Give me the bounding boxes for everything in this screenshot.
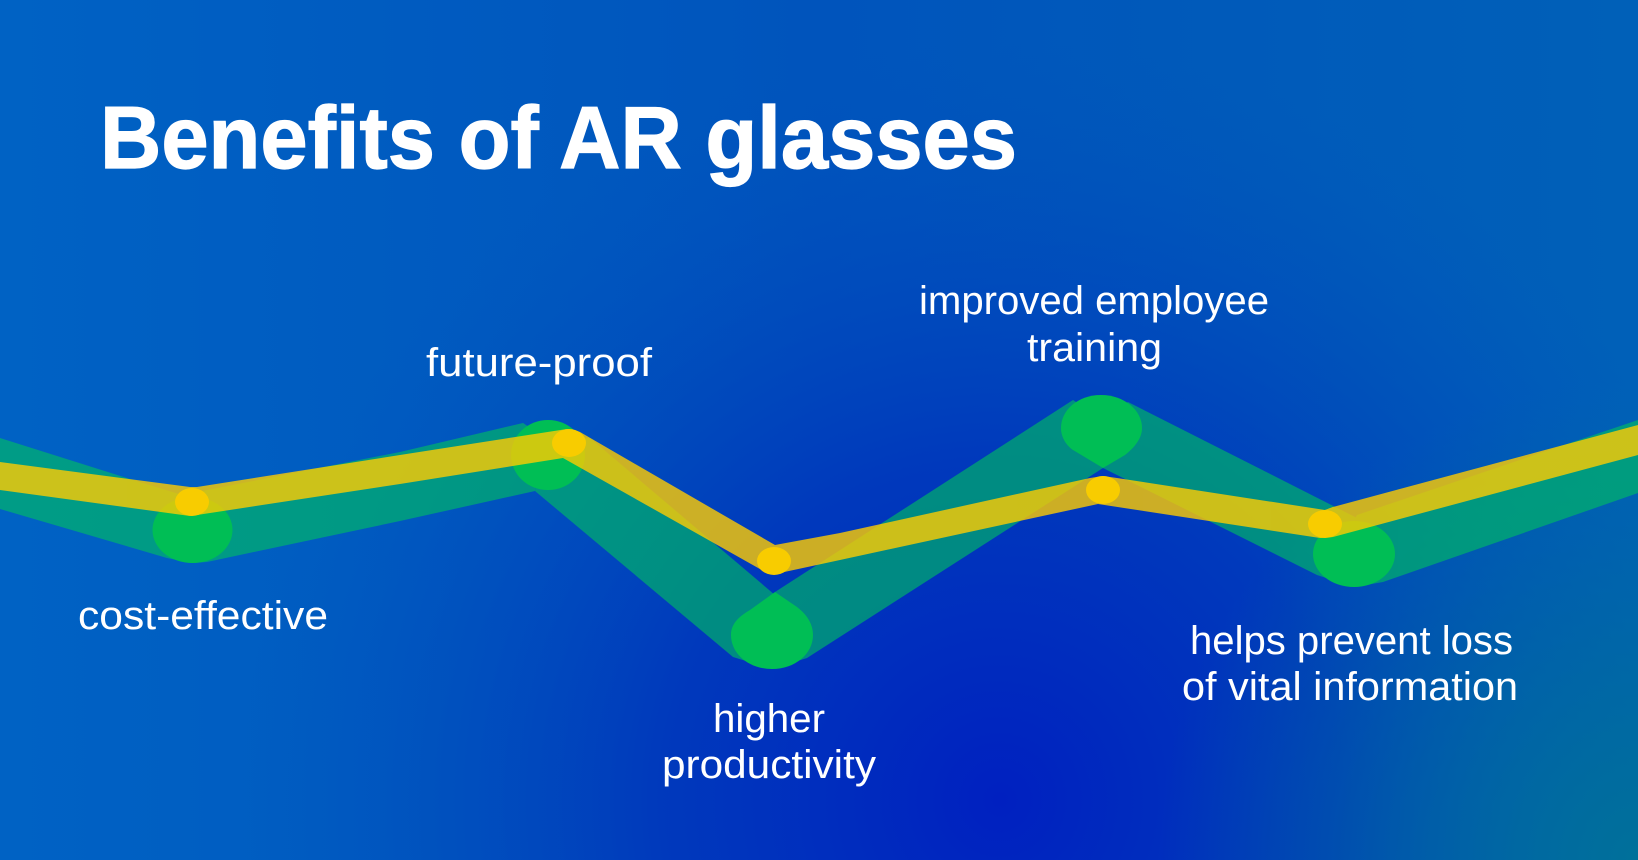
node: higher productivity xyxy=(731,592,813,669)
label: helps prevent loss of vital information: of vital information xyxy=(1182,665,1518,709)
label: helps prevent loss of vital information xyxy=(1182,619,1518,709)
label: higher productivity: higher xyxy=(713,697,825,741)
label: helps prevent loss of vital information: helps prevent loss xyxy=(1190,619,1513,663)
node: future-proof xyxy=(511,420,585,490)
node: improved employee training xyxy=(1061,395,1142,468)
title: Benefits of AR glasses xyxy=(100,88,1017,187)
label: improved employee training xyxy=(919,279,1269,370)
label: future-proof: future-proof xyxy=(426,341,653,385)
label: higher productivity: productivity xyxy=(662,743,876,787)
label: improved employee training: training xyxy=(1027,326,1162,370)
label: higher productivity xyxy=(662,697,876,787)
green zigzag band xyxy=(0,400,1638,669)
node: cost-effective xyxy=(152,497,232,563)
green nodes xyxy=(152,395,1395,669)
label: improved employee training: improved employee xyxy=(919,279,1269,323)
node: helps prevent loss xyxy=(1313,521,1395,587)
yellow nodes xyxy=(175,429,1342,575)
label: cost-effective: cost-effective xyxy=(78,594,328,638)
yellow zigzag band xyxy=(0,425,1638,574)
